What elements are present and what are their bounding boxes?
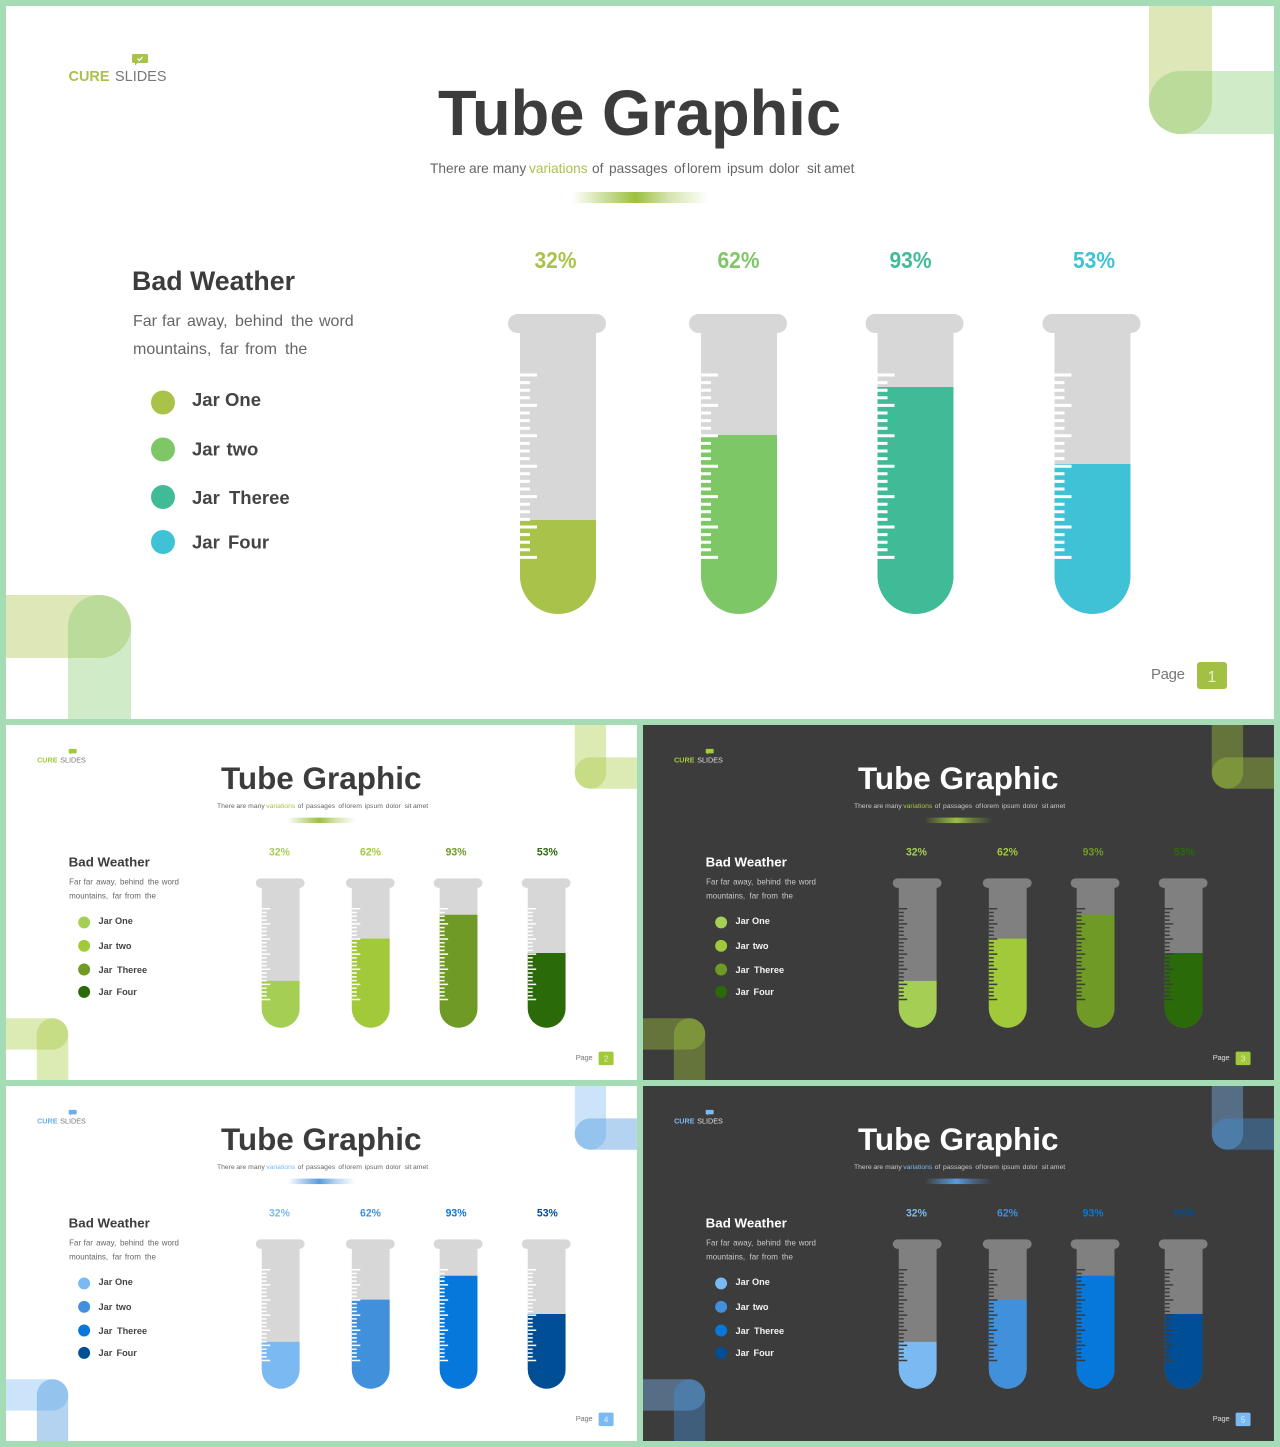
legend item: Jar Theree xyxy=(715,963,784,975)
description text: word xyxy=(798,1238,816,1247)
description text: from xyxy=(125,891,143,900)
tube chart: jar three xyxy=(434,1239,482,1389)
legend item: Jar Theree: Theree xyxy=(117,1326,147,1336)
description text: word xyxy=(798,877,816,886)
subtitle: lorem xyxy=(687,161,725,176)
description text: Far xyxy=(133,313,161,330)
description text: the xyxy=(782,891,793,900)
panel: light slide, green palette xyxy=(6,725,637,1080)
value: 32%: 32% xyxy=(269,1207,290,1219)
decoration: bottom left corner bands xyxy=(643,1018,705,1080)
subtitle: many xyxy=(885,803,904,810)
subtitle: amet xyxy=(1050,803,1065,810)
description text: away, xyxy=(733,877,755,886)
legend item: Jar One: Jar xyxy=(736,1277,752,1287)
description text: from xyxy=(125,1252,143,1261)
legend xyxy=(78,916,147,998)
legend item: Jar Four: Jar xyxy=(736,987,752,997)
description text: far xyxy=(162,313,185,330)
value: 93%: 93% xyxy=(446,1207,467,1219)
logo: Cure Slides: SLIDES xyxy=(60,755,86,764)
subtitle: lorem xyxy=(982,1164,1001,1171)
legend item: Jar Theree xyxy=(78,963,147,975)
value: 62%: 62% xyxy=(997,846,1018,858)
value: 53%: 53% xyxy=(1174,1207,1195,1219)
legend item: Jar two: Jar xyxy=(736,941,752,951)
subtitle: of xyxy=(298,1164,305,1171)
legend item: Jar Four: Jar xyxy=(99,987,115,997)
subtitle: variations xyxy=(266,803,297,810)
legend item: Jar two: Jar xyxy=(99,1302,115,1312)
legend item: Jar Four: Four xyxy=(116,987,137,997)
value: 93%: 93% xyxy=(1083,1207,1104,1219)
subtitle: dolor xyxy=(1023,803,1040,810)
subtitle: passages xyxy=(609,161,671,176)
subtitle: ipsum xyxy=(365,803,385,810)
legend item: Jar Four: Four xyxy=(116,1348,137,1358)
tube chart: jar three xyxy=(1071,878,1119,1028)
tube chart: jar four xyxy=(1159,1239,1208,1389)
value: 93%: 93% xyxy=(446,846,467,858)
value: 53%: 53% xyxy=(537,1207,558,1219)
description text: Far xyxy=(69,1238,83,1247)
description text: far xyxy=(749,891,761,900)
subtitle: of xyxy=(935,803,942,810)
description text: the xyxy=(782,1252,793,1261)
tube chart: jar three xyxy=(434,878,482,1028)
legend xyxy=(78,1277,147,1359)
tube chart: jar four xyxy=(522,878,571,1028)
tube chart: jar one xyxy=(893,878,942,1028)
value: 93%: 93% xyxy=(890,247,932,273)
page label and number: 1 xyxy=(1208,669,1217,686)
legend item: Jar One: Jar xyxy=(99,916,115,926)
tube chart: jar two xyxy=(346,878,395,1028)
page label and number: Page xyxy=(1213,1414,1230,1423)
decoration: bottom left corner bands xyxy=(643,1379,705,1441)
description text: behind xyxy=(120,877,146,886)
legend item: Jar One xyxy=(715,916,770,928)
heading: Bad Weather: Bad Weather xyxy=(706,854,787,869)
panel: main slide, green and teal palette xyxy=(6,6,1274,719)
heading: Bad Weather: Bad Weather xyxy=(69,854,150,869)
legend item: Jar two xyxy=(151,438,258,462)
legend item: Jar Theree: Jar xyxy=(192,487,225,508)
subtitle: There xyxy=(854,803,874,810)
page label and number: 2 xyxy=(604,1055,609,1064)
legend item: Jar Theree: Theree xyxy=(754,1326,784,1336)
legend item: Jar One: Jar xyxy=(192,389,225,410)
description text: far xyxy=(84,877,95,886)
logo: Cure Slides: CURE xyxy=(674,755,695,764)
description text: far xyxy=(220,341,243,358)
subtitle: of xyxy=(935,1164,942,1171)
logo: Cure Slides xyxy=(674,1110,723,1125)
legend item: Jar Four xyxy=(78,1347,137,1359)
legend item: Jar One: One xyxy=(752,1277,770,1287)
description text: the xyxy=(785,1238,798,1247)
subtitle: lorem xyxy=(345,1164,364,1171)
legend item: Jar two: two xyxy=(226,438,258,460)
subtitle: of xyxy=(298,803,305,810)
decoration: bottom left corner bands xyxy=(6,1018,68,1080)
page label and number: Page xyxy=(1151,666,1185,683)
gradient underline xyxy=(288,818,355,823)
logo: Cure Slides xyxy=(37,1110,86,1125)
page label and number: 4 xyxy=(604,1416,609,1425)
description text: far xyxy=(749,1252,761,1261)
description text: far xyxy=(112,1252,124,1261)
legend item: Jar One: Jar xyxy=(736,916,752,926)
description text xyxy=(133,313,354,358)
legend item: Jar Four xyxy=(78,986,137,998)
logo: Cure Slides: CURE xyxy=(674,1116,695,1125)
tube chart: jar two xyxy=(983,1239,1032,1389)
logo: Cure Slides: SLIDES xyxy=(115,68,166,85)
subtitle: ipsum xyxy=(365,1164,385,1171)
description text: from xyxy=(762,891,780,900)
description text: behind xyxy=(757,1238,783,1247)
decoration: top right corner bands xyxy=(575,725,637,789)
subtitle: lorem xyxy=(345,803,364,810)
legend item: Jar Theree: Jar xyxy=(99,965,115,975)
tube chart: jar three xyxy=(1071,1239,1119,1389)
value: 32%: 32% xyxy=(906,846,927,858)
legend item: Jar Four: Jar xyxy=(736,1348,752,1358)
subtitle: of xyxy=(592,161,607,176)
value: 32%: 32% xyxy=(269,846,290,858)
slide background xyxy=(643,1086,1274,1441)
legend item: Jar Four xyxy=(151,530,269,554)
slide background xyxy=(6,6,1274,719)
description text: far xyxy=(112,891,124,900)
subtitle: of xyxy=(338,803,346,810)
legend item: Jar two: two xyxy=(753,1302,769,1312)
legend item: Jar Theree xyxy=(715,1324,784,1336)
legend xyxy=(151,389,290,554)
subtitle: ipsum xyxy=(727,161,767,176)
subtitle: many xyxy=(885,1164,904,1171)
page label and number xyxy=(1213,1052,1251,1065)
legend item: Jar two: two xyxy=(116,1302,132,1312)
description text: Far xyxy=(706,1238,720,1247)
panel: light slide, blue palette xyxy=(6,1086,637,1441)
gradient underline xyxy=(925,1179,992,1184)
page label and number: Page xyxy=(1213,1053,1230,1062)
description text: away, xyxy=(187,313,232,330)
description text: the xyxy=(148,1238,161,1247)
tube chart: jar two xyxy=(346,1239,395,1389)
legend item: Jar Theree: Jar xyxy=(736,1326,752,1336)
legend item: Jar two: two xyxy=(116,941,132,951)
page label and number: 5 xyxy=(1241,1416,1246,1425)
subtitle: variations xyxy=(266,1164,297,1171)
legend item: Jar Theree: Theree xyxy=(229,487,290,508)
legend item: Jar One: One xyxy=(225,389,261,410)
tube chart: jar three xyxy=(866,314,964,614)
slide background xyxy=(6,1086,637,1441)
subtitle: amet xyxy=(413,1164,428,1171)
legend item: Jar two: Jar xyxy=(736,1302,752,1312)
subtitle: of xyxy=(674,161,689,176)
page label and number xyxy=(1151,662,1227,689)
subtitle: sit xyxy=(1042,1164,1050,1171)
description text: from xyxy=(245,341,281,358)
description text: word xyxy=(318,313,354,330)
subtitle: variations xyxy=(903,1164,934,1171)
title: Tube Graphic xyxy=(221,760,421,796)
subtitle: variations xyxy=(903,803,934,810)
legend item: Jar two xyxy=(715,940,769,952)
subtitle: amet xyxy=(1050,1164,1065,1171)
logo: Cure Slides xyxy=(674,749,723,764)
description text: behind xyxy=(120,1238,146,1247)
slide background xyxy=(643,725,1274,1080)
subtitle: passages xyxy=(306,803,337,810)
legend item: Jar Four: Four xyxy=(228,532,269,552)
subtitle: sit xyxy=(405,803,413,810)
subtitle: many xyxy=(493,161,530,176)
value: 62%: 62% xyxy=(360,846,381,858)
legend item: Jar Four: Four xyxy=(753,1348,774,1358)
description text xyxy=(706,1238,816,1261)
subtitle: passages xyxy=(943,1164,974,1171)
subtitle: lorem xyxy=(982,803,1001,810)
legend item: Jar Four: Four xyxy=(753,987,774,997)
subtitle: are xyxy=(236,803,248,810)
title: Tube Graphic xyxy=(438,77,841,149)
description text: the xyxy=(785,877,798,886)
panel: dark slide, green palette xyxy=(643,725,1274,1080)
legend item: Jar One: Jar xyxy=(99,1277,115,1287)
value: 53%: 53% xyxy=(1073,247,1115,273)
description text: mountains, xyxy=(69,1252,110,1261)
description text: behind xyxy=(757,877,783,886)
logo: Cure Slides xyxy=(37,749,86,764)
page label and number xyxy=(576,1052,614,1065)
decoration: bottom left corner bands xyxy=(6,1379,68,1441)
subtitle: dolor xyxy=(769,161,803,176)
subtitle: There xyxy=(430,161,470,176)
tube chart: jar four xyxy=(1159,878,1208,1028)
description text: far xyxy=(721,877,732,886)
subtitle: dolor xyxy=(386,803,403,810)
legend item: Jar two xyxy=(78,940,132,952)
legend item: Jar Theree: Jar xyxy=(99,1326,115,1336)
description text: away, xyxy=(96,1238,118,1247)
legend item: Jar Theree xyxy=(78,1324,147,1336)
legend item: Jar two xyxy=(715,1301,769,1313)
decoration: top right corner bands xyxy=(1212,725,1274,789)
page label and number: Page xyxy=(576,1414,593,1423)
subtitle: of xyxy=(975,803,983,810)
legend item: Jar two: Jar xyxy=(192,438,225,460)
description text: behind xyxy=(235,313,288,330)
legend item: Jar Theree: Theree xyxy=(117,965,147,975)
legend item: Jar Four: Jar xyxy=(99,1348,115,1358)
legend item: Jar One: One xyxy=(115,1277,133,1287)
legend item: Jar two xyxy=(78,1301,132,1313)
page label and number: Page xyxy=(576,1053,593,1062)
logo: Cure Slides: CURE xyxy=(68,68,110,85)
page label and number: 3 xyxy=(1241,1055,1246,1064)
page label and number xyxy=(1213,1413,1251,1426)
logo: Cure Slides: SLIDES xyxy=(697,755,723,764)
subtitle: sit xyxy=(405,1164,413,1171)
description text: the xyxy=(145,891,156,900)
subtitle: many xyxy=(248,803,267,810)
subtitle: sit xyxy=(1042,803,1050,810)
value: 32%: 32% xyxy=(534,247,576,273)
decoration: top right corner bands xyxy=(575,1086,637,1150)
subtitle: of xyxy=(975,1164,983,1171)
gradient underline xyxy=(288,1179,355,1184)
description text: word xyxy=(161,1238,179,1247)
legend item: Jar One xyxy=(151,389,261,414)
subtitle: are xyxy=(873,1164,885,1171)
subtitle: of xyxy=(338,1164,346,1171)
subtitle: amet xyxy=(413,803,428,810)
value: 53%: 53% xyxy=(1174,846,1195,858)
heading: Bad Weather: Bad Weather xyxy=(69,1215,150,1230)
value: 62%: 62% xyxy=(718,247,760,273)
description text: far xyxy=(84,1238,95,1247)
description text: mountains, xyxy=(706,891,747,900)
subtitle: ipsum xyxy=(1002,1164,1022,1171)
tube chart: jar one xyxy=(256,1239,305,1389)
title: Tube Graphic xyxy=(858,760,1058,796)
legend xyxy=(715,1277,784,1359)
description text: the xyxy=(148,877,161,886)
value: 93%: 93% xyxy=(1083,846,1104,858)
subtitle: There xyxy=(854,1164,874,1171)
tube chart: jar four xyxy=(1042,314,1140,614)
value: 62%: 62% xyxy=(360,1207,381,1219)
subtitle: passages xyxy=(943,803,974,810)
subtitle: dolor xyxy=(1023,1164,1040,1171)
gradient underline xyxy=(925,818,992,823)
legend item: Jar Theree: Jar xyxy=(736,965,752,975)
page label and number xyxy=(576,1413,614,1426)
legend item: Jar Theree xyxy=(151,485,290,509)
logo: Cure Slides xyxy=(68,54,166,85)
subtitle: many xyxy=(248,1164,267,1171)
description text: from xyxy=(762,1252,780,1261)
logo: Cure Slides: CURE xyxy=(37,755,58,764)
legend item: Jar Theree: Theree xyxy=(754,965,784,975)
subtitle: passages xyxy=(306,1164,337,1171)
legend item: Jar One xyxy=(715,1277,770,1289)
subtitle: dolor xyxy=(386,1164,403,1171)
description text: away, xyxy=(733,1238,755,1247)
legend item: Jar One xyxy=(78,1277,133,1289)
slide background xyxy=(6,725,637,1080)
heading: Bad Weather: Bad Weather xyxy=(706,1215,787,1230)
title: Tube Graphic xyxy=(221,1121,421,1157)
title: Tube Graphic xyxy=(858,1121,1058,1157)
value: 62%: 62% xyxy=(997,1207,1018,1219)
subtitle: There xyxy=(217,1164,237,1171)
tube chart: jar one xyxy=(256,878,305,1028)
subtitle: ipsum xyxy=(1002,803,1022,810)
subtitle: are xyxy=(469,161,493,176)
decoration: bottom left corner bands xyxy=(6,595,131,719)
description text xyxy=(69,1238,179,1261)
subtitle: are xyxy=(873,803,885,810)
description text: mountains, xyxy=(69,891,110,900)
subtitle: variations xyxy=(529,161,591,176)
legend item: Jar two: two xyxy=(753,941,769,951)
tube chart: jar one xyxy=(508,314,606,614)
decoration: top right corner bands xyxy=(1149,6,1274,134)
gradient underline xyxy=(572,192,708,203)
tube chart: jar two xyxy=(689,314,787,614)
description text: the xyxy=(291,313,318,330)
legend item: Jar One: One xyxy=(752,916,770,926)
description text: far xyxy=(721,1238,732,1247)
tube chart: jar two xyxy=(983,878,1032,1028)
legend item: Jar One xyxy=(78,916,133,928)
description text: Far xyxy=(706,877,720,886)
legend xyxy=(715,916,784,998)
legend item: Jar Four xyxy=(715,1347,774,1359)
description text xyxy=(706,877,816,900)
description text: word xyxy=(161,877,179,886)
logo: Cure Slides: CURE xyxy=(37,1116,58,1125)
value: 32%: 32% xyxy=(906,1207,927,1219)
subtitle: sit xyxy=(807,161,824,176)
legend item: Jar One: One xyxy=(115,916,133,926)
decoration: top right corner bands xyxy=(1212,1086,1274,1150)
panel: dark slide, blue palette xyxy=(643,1086,1274,1441)
logo: Cure Slides: SLIDES xyxy=(697,1116,723,1125)
description text: away, xyxy=(96,877,118,886)
legend item: Jar two: Jar xyxy=(99,941,115,951)
description text xyxy=(69,877,179,900)
description text: mountains, xyxy=(133,341,216,358)
logo: Cure Slides: SLIDES xyxy=(60,1116,86,1125)
description text: the xyxy=(285,341,307,358)
description text: Far xyxy=(69,877,83,886)
legend item: Jar Four xyxy=(715,986,774,998)
subtitle: amet xyxy=(824,161,855,176)
tube chart: jar four xyxy=(522,1239,571,1389)
description text: mountains, xyxy=(706,1252,747,1261)
tube chart: jar one xyxy=(893,1239,942,1389)
legend item: Jar Four: Jar xyxy=(192,532,225,552)
subtitle: are xyxy=(236,1164,248,1171)
subtitle: There xyxy=(217,803,237,810)
value: 53%: 53% xyxy=(537,846,558,858)
heading: Bad Weather: Bad Weather xyxy=(132,266,295,296)
description text: the xyxy=(145,1252,156,1261)
